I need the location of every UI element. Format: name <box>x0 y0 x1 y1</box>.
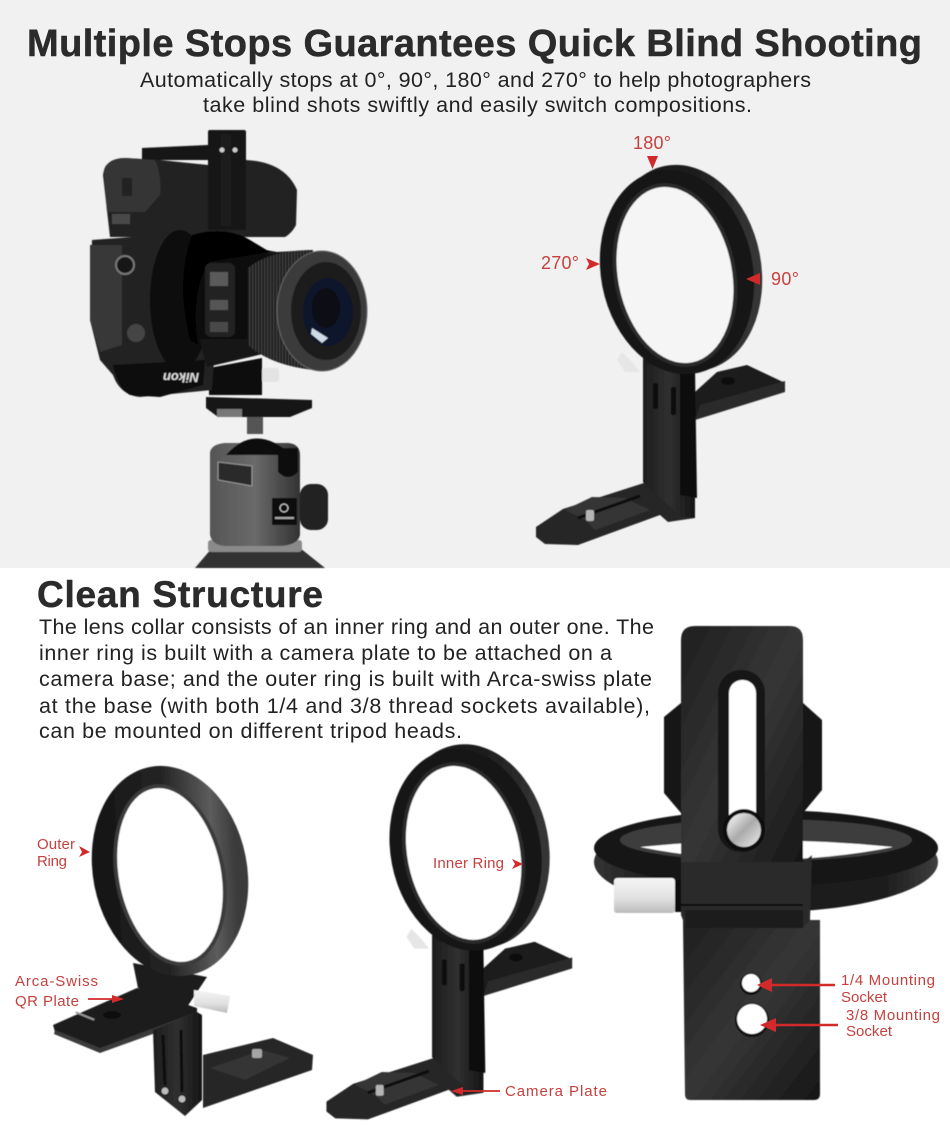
wings <box>664 703 681 813</box>
neck and knob <box>133 963 207 1013</box>
callout: 180 degrees <box>633 133 671 169</box>
photo: ring mount, inner ring view <box>326 731 572 1119</box>
body paragraph: at the base (with both 1/4 and 3/8 thread sockets available), <box>39 694 650 718</box>
callout: 3/8 mounting socket: 3/8 Mounting <box>846 1007 940 1024</box>
camera body: Nikon <box>163 370 199 385</box>
callout: 90 degrees: 90° <box>771 269 799 289</box>
body paragraph: The lens collar consists of an inner ring and an outer one. The <box>39 615 654 639</box>
horizontal ring <box>594 812 938 912</box>
callout: 1/4 mounting socket <box>757 972 935 1006</box>
callout: inner ring: Inner Ring <box>433 855 504 872</box>
callout: outer ring: Outer <box>37 836 75 853</box>
callout: arca-swiss QR plate: Arca-Swiss <box>15 973 98 990</box>
lens <box>150 230 367 371</box>
column <box>153 1012 202 1116</box>
sockets <box>740 973 762 995</box>
body paragraph: camera base; and the outer ring is built with Arca-swiss plate <box>39 667 652 691</box>
body paragraph <box>39 615 654 743</box>
lower plate <box>683 920 820 1100</box>
callout: 180 degrees: 180° <box>633 133 671 153</box>
top panel background <box>0 0 950 568</box>
subtitle: Automatically stops at 0°, 90°, 180° and 270° to help photographers <box>140 68 811 92</box>
arca-swiss plate <box>53 988 197 1052</box>
upper plate <box>681 626 803 870</box>
body paragraph: can be mounted on different tripod heads. <box>39 719 462 743</box>
title: Multiple Stops Guarantees Quick Blind Shooting <box>27 23 922 65</box>
ball head <box>210 438 328 546</box>
lower base plate <box>203 1038 313 1108</box>
photo: ring mount, outer ring view <box>53 752 313 1116</box>
camera grip <box>103 145 297 237</box>
body paragraph: inner ring is built with a camera plate to be attached on a <box>39 641 612 665</box>
photo: ring mount with stop markers <box>536 151 785 545</box>
clamp block <box>681 855 812 928</box>
quick release clamp <box>206 358 312 434</box>
callout: 270 degrees: 270° <box>541 253 579 273</box>
slot <box>718 670 765 852</box>
ring <box>74 752 266 990</box>
callout: camera plate <box>451 1083 607 1100</box>
callout: 3/8 mounting socket <box>760 1007 940 1040</box>
callout: 1/4 mounting socket: Socket <box>841 989 888 1006</box>
camera body <box>90 232 222 397</box>
heading: clean structure: Clean Structure <box>37 574 323 615</box>
callout: 3/8 mounting socket: Socket <box>846 1023 893 1040</box>
callout: 270 degrees <box>541 253 600 273</box>
callout: 90 degrees <box>746 269 799 289</box>
knob <box>614 878 675 913</box>
callout: camera plate: Camera Plate <box>505 1083 607 1100</box>
subtitle: take blind shots swiftly and easily switch compositions. <box>203 93 752 117</box>
tripod base <box>195 540 325 568</box>
callout: arca-swiss QR plate: QR Plate <box>15 993 79 1010</box>
photo: ring mount, front view <box>594 626 938 1100</box>
callout: 1/4 mounting socket: 1/4 Mounting <box>841 972 935 989</box>
callout: outer ring: Ring <box>37 853 67 870</box>
dovetail rail <box>208 130 246 230</box>
subtitle <box>140 68 811 117</box>
callout: arca-swiss QR plate <box>15 973 124 1010</box>
photo: camera with lens collar on ball head <box>90 130 367 568</box>
callout: outer ring <box>37 836 90 870</box>
